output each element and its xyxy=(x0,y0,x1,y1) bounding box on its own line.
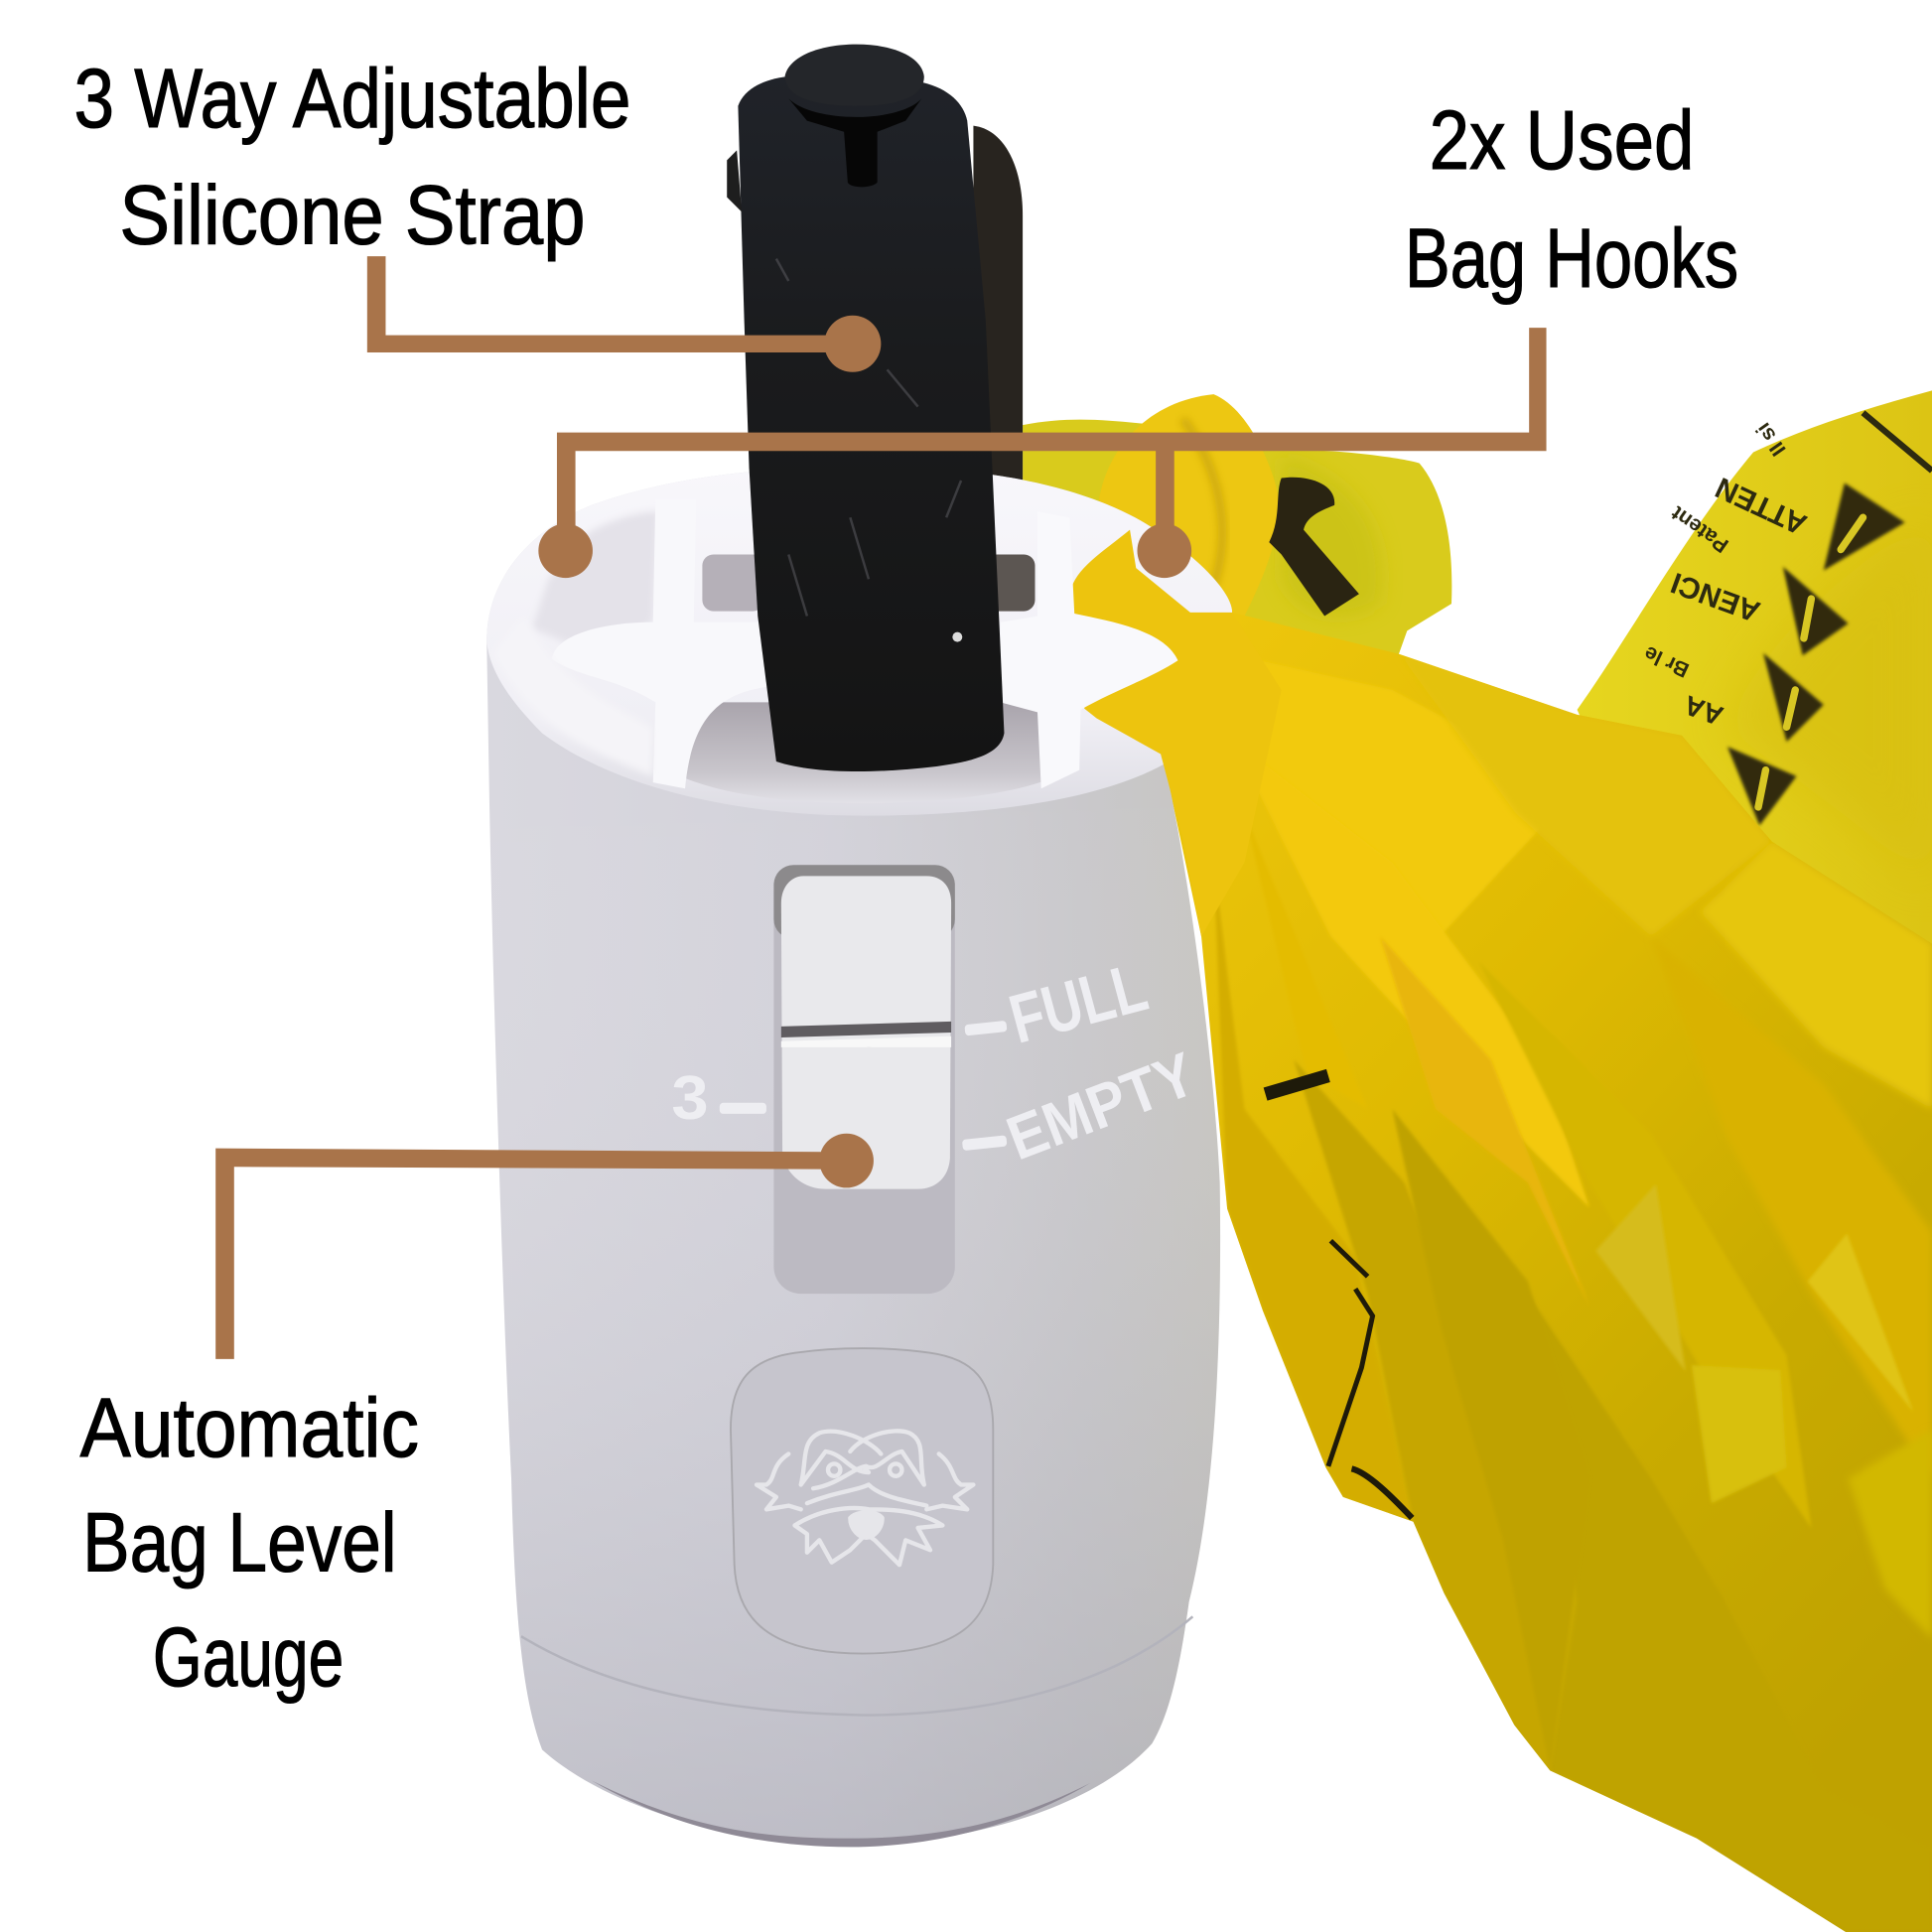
gauge markings: EMPTY xyxy=(998,1039,1204,1173)
gauge slider xyxy=(781,876,951,1189)
back tied bag knot xyxy=(1023,394,1451,665)
upper left slot xyxy=(702,554,763,612)
gauge markings: FULL xyxy=(1002,947,1155,1058)
callout: bag hooks leader xyxy=(538,328,1547,578)
callout: silicone strap leader xyxy=(367,256,881,372)
silicone strap rear loop xyxy=(973,126,1023,481)
gauge markings: 3 xyxy=(671,1064,709,1133)
heading: hooks label xyxy=(1405,93,1738,305)
heading: hooks label: Bag Hooks xyxy=(1405,211,1738,305)
release button with dog logo xyxy=(731,1348,993,1654)
heading: hooks label: 2x Used xyxy=(1430,93,1694,187)
strap slit xyxy=(788,98,921,187)
heading: gauge label: Automatic xyxy=(80,1381,419,1474)
strap button xyxy=(785,45,924,106)
bag printed text xyxy=(1641,418,1812,732)
gauge markings xyxy=(671,947,1204,1173)
body base seam xyxy=(521,1616,1192,1716)
silicone strap front xyxy=(727,45,1004,771)
bag printed text: II si xyxy=(1752,418,1791,460)
bag warning triangles xyxy=(1727,483,1905,826)
back bag roll xyxy=(1578,390,1932,1109)
heading: strap label: 3 Way Adjustable xyxy=(73,52,630,145)
bag printed text: AA xyxy=(1680,689,1727,732)
base bottom shadow xyxy=(592,1780,1090,1847)
upper right slot xyxy=(986,554,1035,612)
bag black print xyxy=(1266,1075,1412,1518)
heading: gauge label: Bag Level xyxy=(82,1495,397,1588)
lower slot xyxy=(684,702,1049,803)
bag printed text: ATTEN xyxy=(1711,471,1812,541)
heading: gauge label xyxy=(80,1381,419,1704)
heading: strap label: Silicone Strap xyxy=(119,169,586,262)
heading: gauge label: Gauge xyxy=(153,1610,344,1704)
left recess xyxy=(532,511,659,653)
bag neck wrapped on hook xyxy=(1070,530,1282,936)
bag printed text: AENCI xyxy=(1667,566,1764,628)
yellow used bag xyxy=(1170,615,1932,1932)
bag printed text: Patent xyxy=(1667,501,1732,557)
dispenser body xyxy=(486,466,1282,1847)
black print on knot xyxy=(1269,478,1359,617)
callout: bag level leader xyxy=(215,1134,874,1359)
bag folds xyxy=(1171,640,1932,1932)
left peg xyxy=(552,499,788,788)
dispenser top cap xyxy=(486,466,1282,936)
bag printed text: Br le xyxy=(1641,641,1693,681)
right peg xyxy=(1001,511,1177,788)
dog face logo xyxy=(757,1431,973,1565)
bag level gauge window xyxy=(773,865,955,1294)
heading: strap label xyxy=(73,52,630,262)
